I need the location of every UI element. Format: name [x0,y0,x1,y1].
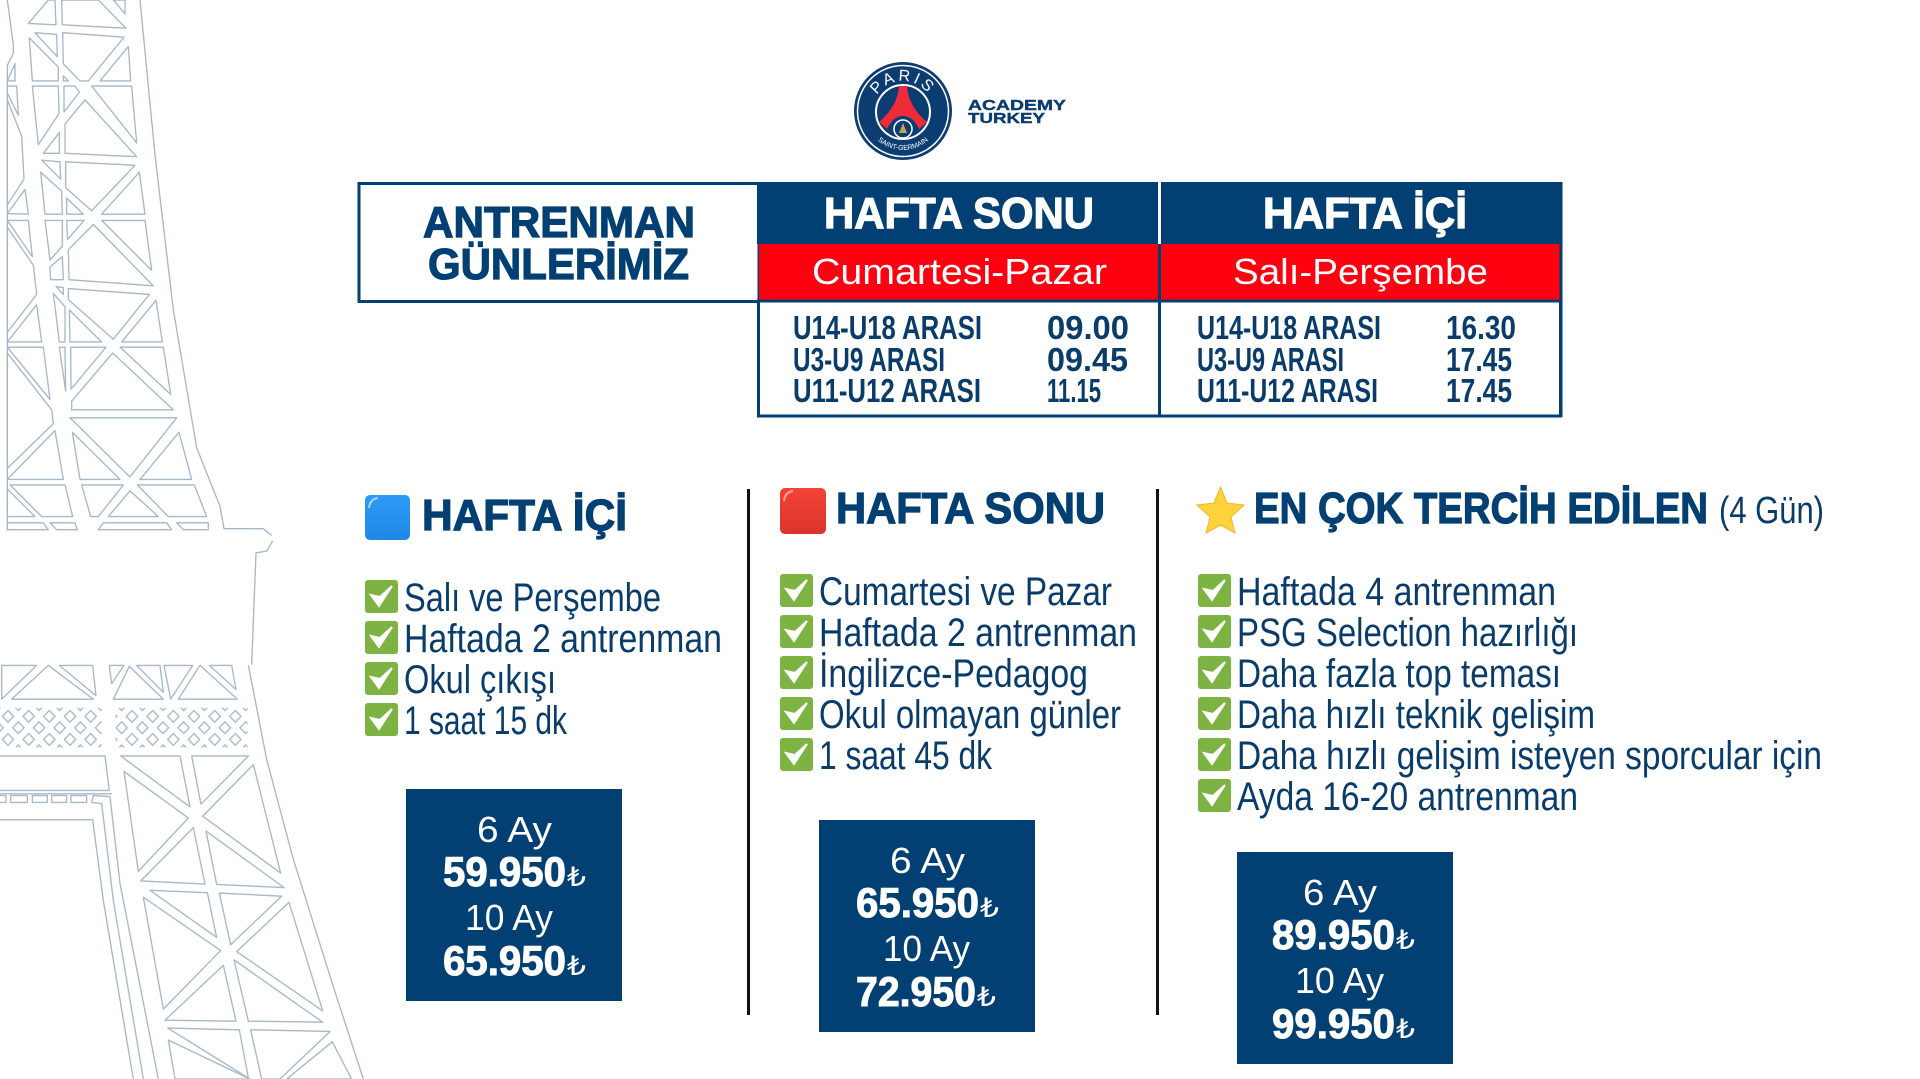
price box: 10 Ay [1295,960,1384,1001]
price box: 65.950 [856,879,979,926]
column: hafta ici: 17.45 [1446,372,1512,409]
icon: PSG crest: SAINT-GERMAIN [878,137,928,150]
price box: ₺ [1396,1014,1415,1044]
icon: blue square [365,495,410,540]
icon: PSG crest [854,62,952,160]
column: hafta ici: 17.45 [1446,341,1512,378]
column: hafta sonu: 11.15 [1047,372,1101,409]
price box: ₺ [980,893,999,923]
price box [1237,852,1453,1064]
price box: 10 Ay [883,928,970,969]
price box: ₺ [567,862,586,892]
checklist: Haftada 2 antrenman [819,611,1137,655]
column: hafta ici: U14-U18 ARASI [1197,309,1381,346]
column: hafta sonu: Cumartesi-Pazar [812,251,1107,292]
checklist: Okul olmayan günler [819,693,1121,737]
price box: 6 Ay [890,840,965,881]
checklist [365,576,722,743]
checklist: Cumartesi ve Pazar [819,570,1112,614]
price box: 72.950 [856,968,976,1015]
icon: red square [780,488,826,534]
panel: en cok tercih edilen [1197,484,1824,1064]
checklist: PSG Selection hazırlığı [1237,611,1578,655]
panel: hafta sonu [780,484,1137,1032]
checklist: Haftada 2 antrenman [404,617,722,661]
column: hafta ici [1158,182,1562,417]
checklist: Haftada 4 antrenman [1237,570,1556,614]
price box: 6 Ay [477,809,552,850]
column: hafta sonu: HAFTA SONU [824,189,1094,238]
column: hafta sonu: U11-U12 ARASI [793,372,981,409]
heading: hafta ici: HAFTA İÇİ [422,491,627,540]
checklist: Daha hızlı gelişim isteyen sporcular için [1237,734,1822,778]
checklist: Ayda 16-20 antrenman [1237,775,1578,819]
column: hafta ici: HAFTA İÇİ [1263,189,1467,238]
table title cell: ANTRENMAN [423,198,695,247]
price box [406,789,622,1001]
checklist: Daha hızlı teknik gelişim [1237,693,1595,737]
checklist: İngilizce-Pedagog [819,651,1088,696]
background: Eiffel tower line art [0,0,363,1079]
checklist: 1 saat 15 dk [404,699,568,743]
column: hafta sonu: U14-U18 ARASI [793,309,982,346]
heading: en cok tercih edilen: EN ÇOK TERCİH EDİLEN [1254,484,1708,533]
price box: 99.950 [1272,1000,1395,1047]
checklist: Okul çıkışı [404,658,556,702]
icon: PSG crest: PARIS [870,70,934,94]
logo text: TURKEY [968,110,1045,127]
price box: ₺ [567,951,586,981]
checklist: 1 saat 45 dk [819,734,993,778]
logo text: ACADEMY [968,97,1066,114]
column: hafta sonu: 09.45 [1047,341,1128,378]
checklist [780,570,1137,778]
checklist [1198,570,1822,819]
column: hafta sonu [757,182,1160,416]
price box: ₺ [1396,925,1415,955]
column: hafta ici: U11-U12 ARASI [1197,372,1378,409]
column: hafta ici: U3-U9 ARASI [1197,341,1344,378]
logo text [968,97,1066,127]
price box: 59.950 [443,848,566,895]
column: hafta ici: Salı-Perşembe [1233,251,1488,292]
price box: 65.950 [443,937,566,984]
column: hafta sonu: U3-U9 ARASI [793,341,945,378]
price box: 89.950 [1272,911,1395,958]
checklist: Daha fazla top teması [1237,652,1561,696]
panel: hafta ici [365,491,722,1001]
price box: 6 Ay [1303,872,1377,913]
heading: hafta sonu: HAFTA SONU [836,484,1105,533]
price box [819,820,1035,1032]
schedule table [359,182,1562,417]
table title cell [359,184,759,302]
heading note: (4 Gün) [1719,490,1824,532]
price box: 10 Ay [465,897,553,938]
logo: PSG Academy Turkey [854,62,1066,160]
price box: ₺ [977,982,996,1012]
checklist: Salı ve Perşembe [404,576,661,620]
column: hafta sonu: 09.00 [1047,309,1129,346]
icon: star [1197,487,1244,533]
column: hafta ici: 16.30 [1446,309,1516,346]
table title cell: GÜNLERİMİZ [428,240,689,289]
